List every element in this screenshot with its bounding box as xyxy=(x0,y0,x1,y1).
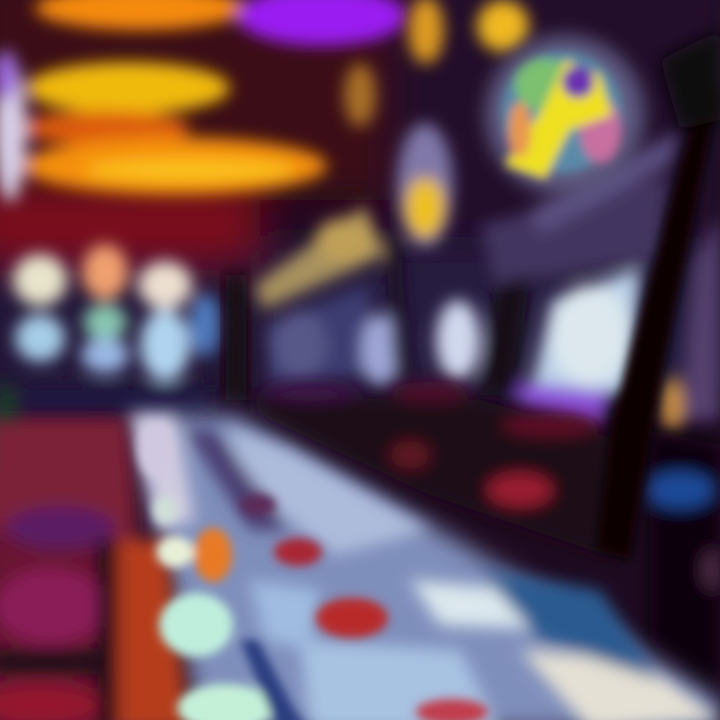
main machine screen xyxy=(532,268,640,395)
rear machine screens xyxy=(255,205,385,310)
light: orange top strip xyxy=(35,0,245,30)
light: pale left column xyxy=(0,58,26,202)
machines row xyxy=(255,0,720,433)
carpet strip and left seats xyxy=(0,420,190,720)
dark bar between machines xyxy=(480,275,530,395)
right edge panels xyxy=(680,215,720,420)
light: purple top panel xyxy=(237,0,407,46)
floor lights and buttons xyxy=(138,423,488,720)
light: yellow core xyxy=(85,158,295,182)
light: yellow band xyxy=(26,62,230,114)
floor aisle xyxy=(130,415,720,720)
rear machine toppers xyxy=(344,63,376,127)
upper right panels xyxy=(480,175,670,285)
light: orange wide band xyxy=(23,137,327,195)
icon: prize wheel xyxy=(485,35,645,195)
machine cabinets and consoles xyxy=(250,382,720,720)
ceiling lights xyxy=(0,0,407,202)
dark diagonal post xyxy=(596,90,720,560)
dark pillar at rear xyxy=(226,275,246,400)
light: orange mid glow xyxy=(20,111,190,145)
figures: three distant machines xyxy=(0,244,220,467)
